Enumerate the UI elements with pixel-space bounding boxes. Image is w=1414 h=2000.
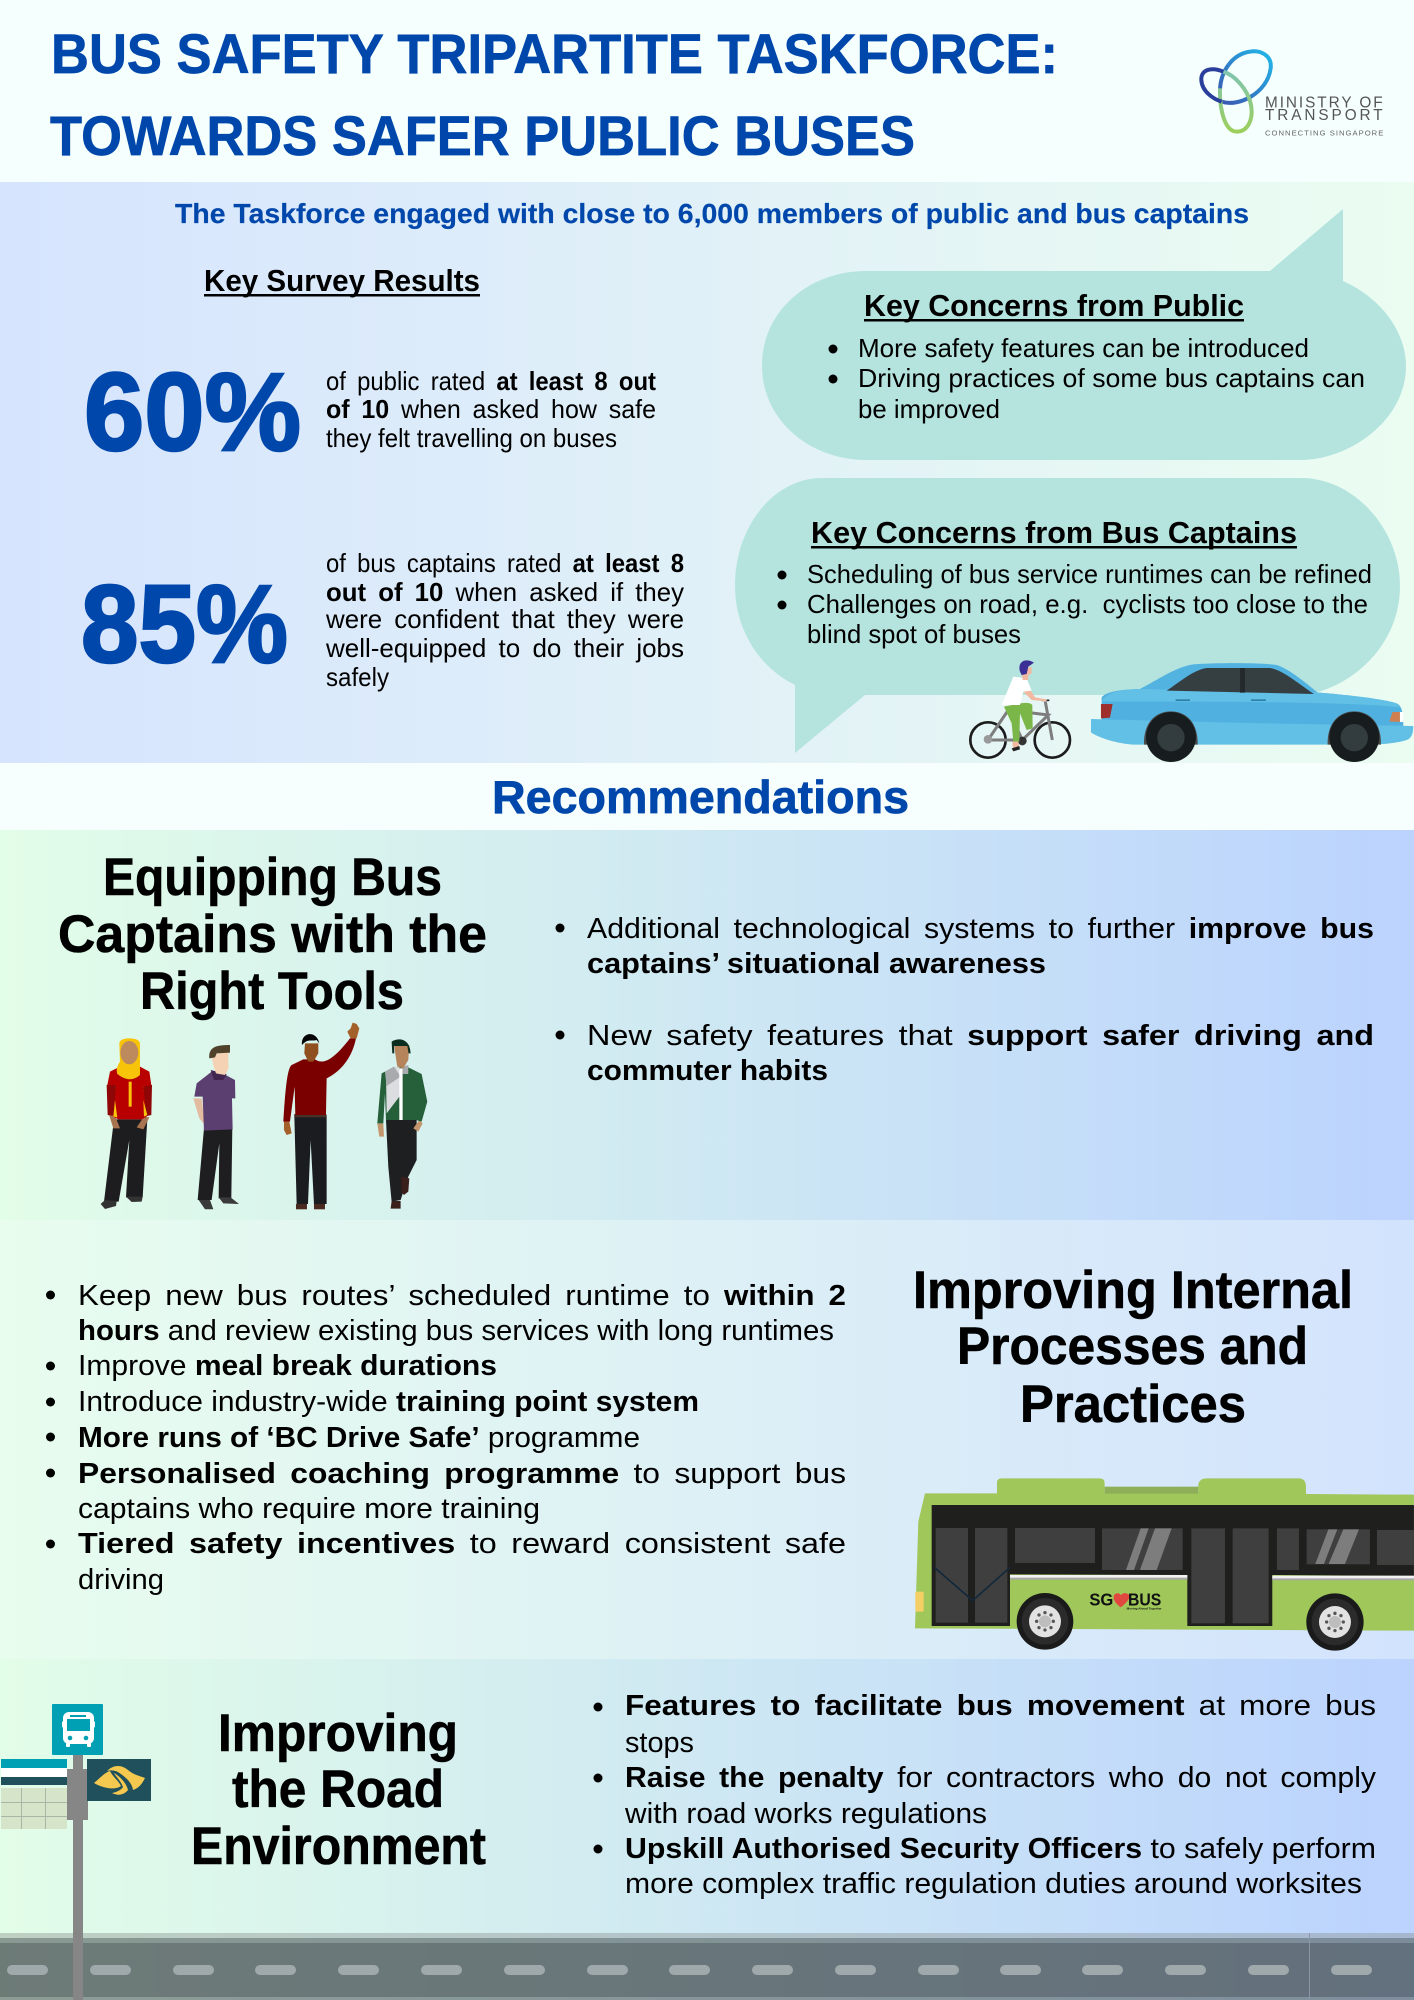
panel: equipping bus captains [0, 830, 1414, 1220]
panel: recommendations band [0, 763, 1414, 830]
bus stop sign [52, 1704, 103, 1755]
text: road environment bullets: Upskill Authorised Security Officers to safely perform [625, 1833, 1376, 1865]
person: man in purple shirt [193, 1045, 239, 1209]
heading: improving internal processes and practices [913, 1261, 1353, 1434]
text: road environment bullets: Raise the penalty for contractors who do not comply [625, 1762, 1377, 1794]
subtitle: The Taskforce engaged with close to 6,000 members of public and bus captains [175, 198, 1249, 229]
callout: key concerns from public [762, 209, 1406, 460]
text: road environment bullets: stops [625, 1727, 694, 1759]
callout: key concerns from bus captains: Scheduling of bus service runtimes can be refined [807, 559, 1372, 589]
text: 85 percent description [325, 548, 684, 692]
icon: four bus captains [101, 1023, 427, 1209]
text: equipping bullets: New safety features that support safer driving and [587, 1020, 1374, 1052]
icon: green bus [915, 1478, 1414, 1651]
bus logo: SG heart BUS: BUS [1128, 1589, 1161, 1609]
heading: improving internal processes and practices: Practices [1020, 1375, 1246, 1434]
SBS Transit sign [87, 1759, 151, 1801]
logo: Ministry of Transport [1201, 51, 1383, 137]
wheel: front [1017, 1593, 1073, 1650]
callout: key concerns from bus captains: Challenges on road, e.g. cyclists too close to the [807, 589, 1368, 619]
icon: car [1091, 663, 1413, 762]
logo: Ministry of Transport: CONNECTING SINGAPORE [1265, 128, 1383, 137]
timetable board [1, 1759, 67, 1829]
text: road environment bullets: Features to facilitate bus movement at more bus [625, 1690, 1376, 1722]
icon: cyclist [970, 660, 1070, 758]
callout: key concerns from bus captains [735, 478, 1400, 753]
heading: improving internal processes and practices: Processes and [957, 1317, 1308, 1376]
callout: key concerns from public: be improved [858, 394, 1000, 424]
text: 85 percent description: out of 10 when asked if they [326, 577, 684, 607]
text: 85 percent description: of bus captains rated at least 8 [326, 548, 684, 578]
logo: Ministry of Transport: TRANSPORT [1265, 107, 1383, 124]
heading: equipping bus captains with the right tools: Right Tools [140, 962, 404, 1021]
text: internal process bullets: Keep new bus routes’ scheduled runtime to within 2 [78, 1280, 846, 1312]
callout: key concerns from bus captains: Key Concerns from Bus Captains [811, 515, 1297, 550]
heading: equipping bus captains with the right tools: Equipping Bus [103, 848, 442, 907]
text: internal process bullets: Introduce industry-wide training point system [78, 1386, 699, 1418]
heading: improving the road environment [191, 1704, 486, 1876]
text: road environment bullets: more complex traffic regulation duties around worksites [625, 1868, 1362, 1900]
title [50, 22, 1058, 167]
heading: equipping bus captains with the right tools [58, 848, 487, 1021]
text: equipping bullets: Additional technological systems to further improve bus [587, 913, 1374, 945]
text: internal process bullets: Improve meal break durations [78, 1350, 497, 1382]
panel: improving the road environment [0, 1659, 1414, 2000]
heading: key survey results: Key Survey Results [204, 263, 480, 298]
text: 60 percent description: of 10 when asked how safe [326, 394, 656, 424]
text: 85 percent description: were confident that they were [325, 604, 684, 634]
text: internal process bullets: Tiered safety incentives to reward consistent safe [78, 1528, 846, 1560]
panel: survey and concerns [0, 182, 1414, 763]
stat: 60 percent: 60% [84, 351, 301, 474]
heading: improving the road environment: the Road [232, 1760, 444, 1819]
text: 60 percent description: of public rated at least 8 out [326, 366, 656, 396]
heading: improving the road environment: Improving [218, 1704, 458, 1763]
person: man with sash [377, 1039, 427, 1209]
heading: equipping bus captains with the right tools: Captains with the [58, 905, 487, 964]
wheel: rear [1306, 1593, 1364, 1651]
bus logo: SG heart BUS: Moving Ahead Together [1127, 1606, 1162, 1610]
text: 85 percent description: well-equipped to do their jobs [325, 633, 684, 663]
stat: 85 percent: 85% [81, 563, 288, 686]
callout: key concerns from public: Driving practices of some bus captains can [858, 363, 1365, 393]
text: internal process bullets: Personalised coaching programme to support bus [78, 1458, 846, 1490]
text: equipping bullets: commuter habits [587, 1055, 828, 1087]
text: internal process bullets: captains who require more training [78, 1493, 540, 1525]
callout: key concerns from bus captains: blind spot of buses [807, 619, 1021, 649]
person: woman in hijab [101, 1038, 152, 1209]
heading: improving internal processes and practices: Improving Internal [913, 1261, 1353, 1320]
person: man waving [283, 1023, 359, 1209]
logo: Ministry of Transport: MINISTRY OF [1265, 94, 1383, 111]
text: internal process bullets: hours and review existing bus services with long runtimes [78, 1315, 834, 1347]
title: TOWARDS SAFER PUBLIC BUSES [50, 104, 915, 167]
text: road environment bullets [594, 1690, 1377, 1900]
text: equipping bullets [556, 913, 1374, 1087]
text: internal process bullets: More runs of ‘BC Drive Safe’ programme [78, 1422, 640, 1454]
road [0, 1933, 1414, 2000]
text: 85 percent description: safely [326, 662, 389, 692]
text: road environment bullets: with road works regulations [624, 1798, 987, 1830]
text: internal process bullets [46, 1280, 846, 1596]
panel: improving internal processes [0, 1220, 1414, 1659]
heading: improving the road environment: Environment [191, 1817, 486, 1876]
callout: key concerns from public: More safety features can be introduced [858, 333, 1309, 363]
text: internal process bullets: driving [78, 1564, 164, 1596]
bus logo: SG heart BUS [1089, 1589, 1162, 1610]
text: 60 percent description: they felt travelling on buses [326, 423, 617, 453]
text: equipping bullets: captains’ situational awareness [587, 948, 1046, 980]
title: BUS SAFETY TRIPARTITE TASKFORCE: [51, 22, 1058, 85]
bus logo: SG heart BUS: SG [1089, 1589, 1113, 1609]
heading: recommendations: Recommendations [492, 771, 909, 823]
icon: bus stop pole and signs [1, 1704, 151, 2000]
text: 60 percent description [326, 366, 656, 453]
panel: header background [0, 0, 1414, 182]
callout: key concerns from public: Key Concerns from Public [864, 288, 1244, 323]
